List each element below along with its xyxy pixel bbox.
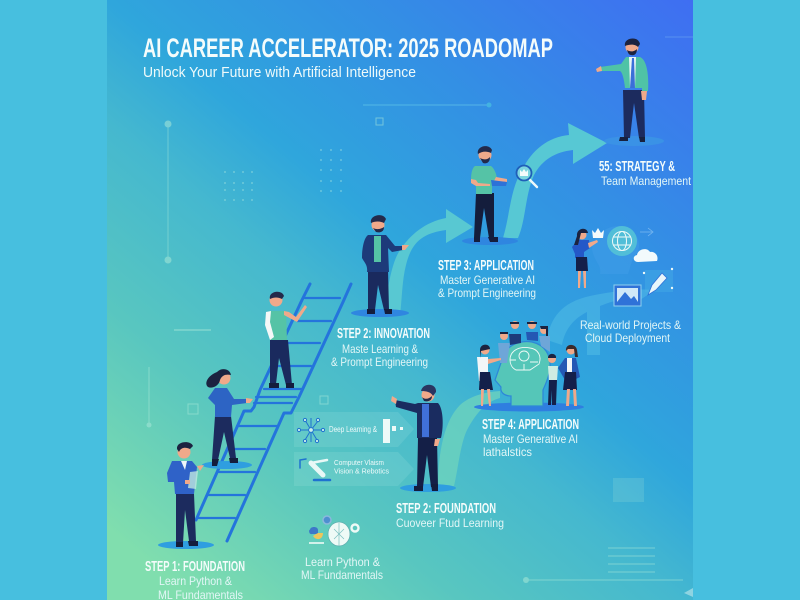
person: climber on ladder [265,292,307,388]
person: foundation man pointing [391,385,456,492]
card: computer vision: Vision & Rebotics [334,466,389,476]
text: step 2 innovation [331,326,430,369]
arrow: step 3 to strategy [503,123,607,238]
text: learn python [301,555,383,582]
subtitle: Unlock Your Future with Artificial Intelligence [143,65,416,81]
arrow: step 2 to step 3 [384,209,473,315]
arrow: foundation to step 4 [438,391,500,488]
person: step 3 application [462,146,518,245]
icon: robotic arm [300,459,330,480]
head outline with globe [592,226,639,274]
text: step 2 foundation: Cuoveer Ftud Learning [396,516,504,530]
text: real-world projects: Cloud Deployment [585,331,671,345]
icon: magnifying glass with crown [516,166,537,187]
icon: python, brain and gears [309,516,358,546]
brain circuit drawing [510,348,540,370]
decorative background lines and dots [146,37,693,597]
head silhouette [495,342,550,406]
person: step 2 innovation [351,215,409,317]
back row people [498,321,550,363]
text: learn python: Learn Python & [305,555,380,569]
text: real-world projects: Real-world Projects & [580,318,681,332]
card: deep learning [294,412,414,447]
text: learn python: ML Fundamentals [301,568,383,582]
card: computer vision [294,452,414,486]
woman right [558,345,580,406]
text: step 4 application: Master Generative AI [483,432,578,446]
illustration: projects and cloud [572,226,673,306]
icon: neural network [297,418,325,443]
text: step 3 application: STEP 3: APPLICATION [438,258,534,274]
icon: small device [383,419,403,443]
title: AI CAREER ACCELERATOR: 2025 ROADOMAP [143,33,553,63]
text: step 3 application: Master Generative AI [440,273,535,287]
text: step 1 foundation: STEP 1: FOUNDATION [145,558,245,575]
text: step 2 foundation [396,501,504,530]
text: step 4 application: STEP 4: APPLICATION [482,417,579,433]
text: step 3 application: & Prompt Engineering [438,286,536,300]
boy right [548,354,558,405]
card: computer vision: Computer Vlaism [334,458,384,467]
text: step 1 foundation [145,558,245,600]
icon: picture frame [614,285,641,306]
arrow: faint curve to projects [547,289,655,355]
person: step 1 man with tablet [158,442,214,549]
ladder [196,284,351,541]
text: step 2 innovation: & Prompt Engineering [331,355,428,369]
person: woman on ladder [202,369,253,469]
icon: crown [592,228,604,238]
icon: data frame with pencil [643,268,673,295]
icon: cloud [634,249,658,262]
background panel [107,0,693,600]
woman with crown [572,229,598,288]
text: strategy step: Team Management [601,174,692,188]
card: deep learning: Deep Learning & [329,424,377,434]
text: step 3 application [438,258,536,300]
person: strategy leader [596,38,664,146]
text: step 2 foundation: STEP 2: FOUNDATION [396,501,496,517]
team around AI head [474,321,584,412]
text: real-world projects [580,318,681,345]
text: step 4 application: lathalstics [483,445,532,459]
text: strategy step [599,159,692,188]
text: strategy step: 55: STRATEGY & [599,159,675,175]
text: step 2 innovation: Maste Learning & [342,342,418,356]
text: step 4 application [482,417,579,459]
text: step 2 innovation: STEP 2: INNOVATION [337,326,430,342]
woman left [477,345,501,406]
text: step 1 foundation: Learn Python & [159,574,232,588]
